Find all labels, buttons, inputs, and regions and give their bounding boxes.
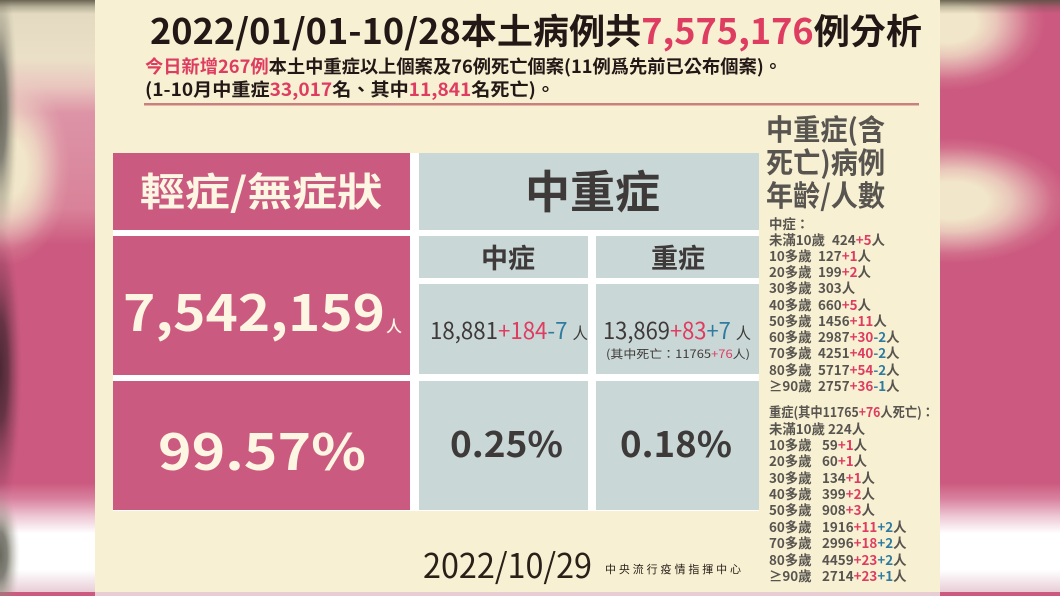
age list: severe: 134 [822, 467, 846, 487]
age list: moderate: 4251 [818, 342, 850, 362]
subheading: severe: 重症 [651, 237, 705, 276]
subtitle [145, 53, 782, 102]
age list: moderate: 20多歲 [769, 261, 812, 281]
age list: moderate: +54-2人 [850, 359, 900, 379]
age list: severe: +11+2人 [854, 516, 907, 536]
age list: severe: 50多歲 [769, 499, 812, 519]
age list: severe: 2996 [822, 532, 854, 552]
age list: severe: 59 [822, 434, 838, 454]
age list: severe: +23+2人 [854, 549, 907, 569]
age list: moderate: +30-2人 [850, 326, 900, 346]
age list: moderate: +40-2人 [850, 342, 900, 362]
age list: moderate: 5717 [818, 359, 850, 379]
blurred background: right strip [940, 0, 1060, 596]
age list: moderate: 人 [842, 277, 855, 297]
age list: severe: 重症(其中11765+76人死亡)： [769, 401, 934, 421]
title: 2022/01/01-10/28本土病例共 7,575,176例分析 [150, 4, 922, 55]
age list: severe: 399 [822, 483, 846, 503]
age list: moderate: +11人 [850, 310, 887, 330]
age list: severe: +1人 [838, 450, 867, 470]
age list: severe: 60 [822, 450, 838, 470]
percentage: severe: 0.18% [620, 417, 732, 468]
panel: mild / asymptomatic [113, 153, 410, 510]
age list: severe [769, 401, 934, 585]
subtitle line 1: 今日新增267例本土中重症以上個案及76例死亡個案(11例爲先前已公布個案)。 [145, 53, 782, 79]
age list: moderate: +36-1人 [850, 375, 900, 395]
age list: severe: 1916 [822, 516, 854, 536]
age list: severe: +1人 [838, 434, 867, 454]
sidebar heading: 死亡)病例 [766, 140, 885, 182]
age list: severe: +3人 [846, 499, 875, 519]
date: 2022/10/29 [423, 539, 592, 588]
age list: severe: +2人 [846, 483, 875, 503]
age list: moderate: 70多歲 [769, 342, 812, 362]
age list: severe: 908 [822, 499, 846, 519]
age list: moderate: 40多歲 [769, 294, 812, 314]
unit: mild: 人 [386, 313, 402, 337]
age list: moderate: 2987 [818, 326, 850, 346]
age list: moderate: 424 [832, 229, 856, 249]
age list: moderate: 50多歲 [769, 310, 812, 330]
deaths note: (其中死亡：11765 +76人) [606, 346, 750, 362]
age list: moderate: +1人 [842, 245, 871, 265]
age list: moderate: 1456 [818, 310, 850, 330]
age list: severe: 4459 [822, 549, 854, 569]
count: mild: 7,542,159 [123, 274, 385, 346]
table backing [113, 153, 759, 511]
subheading: moderate: 中症 [481, 237, 535, 276]
sidebar heading: 中重症(含 [766, 107, 885, 149]
percentage: mild: 99.57% [158, 413, 366, 485]
heading: moderate and severe: 中重症 [525, 156, 660, 221]
percentage: moderate: 0.25% [450, 417, 563, 468]
cream main panel [95, 0, 940, 592]
age list: severe: 60多歲 [769, 516, 812, 536]
age list: moderate: 80多歲 [769, 359, 812, 379]
age list: severe: ≥90歲 [769, 565, 812, 585]
panel: moderate and severe [419, 153, 759, 510]
age list: moderate: 660 [818, 294, 842, 314]
sidebar heading: 年齡/人數 [766, 173, 885, 215]
age list: moderate: 10多歲 [769, 245, 812, 265]
age list: moderate: 2757 [818, 375, 850, 395]
subtitle line 2: (1-10月中重症 33,017名、其中11,841名死亡)。 [145, 76, 555, 102]
heading: mild: 輕症/無症狀 [140, 162, 382, 218]
age list: severe: 30多歲 [769, 467, 812, 487]
age list: moderate: 30多歲 [769, 277, 812, 297]
blurred background: left strip [0, 0, 96, 596]
age list: moderate: +2人 [842, 261, 871, 281]
age list: severe: 未滿10歲 224人 [769, 418, 866, 438]
age list: severe: +23+1人 [854, 565, 907, 585]
count: severe: 13,869+83+7 人 [603, 312, 751, 346]
age list: severe: 10多歲 [769, 434, 812, 454]
age list: moderate: 中症： [769, 213, 809, 233]
age list: severe: +1人 [846, 467, 875, 487]
age list: moderate: 127 [818, 245, 842, 265]
age list: severe: 40多歲 [769, 483, 812, 503]
age list: severe: 80多歲 [769, 549, 812, 569]
age list: moderate [769, 213, 900, 395]
age list: moderate: 199 [818, 261, 842, 281]
age list: moderate: +5人 [842, 294, 871, 314]
sidebar heading [766, 107, 885, 215]
age list: severe: 2714 [822, 565, 854, 585]
age list: moderate: 未滿10歲 [769, 229, 825, 249]
age list: severe: 20多歲 [769, 450, 812, 470]
age list: moderate: 303 [818, 277, 842, 297]
age list: severe: +18+2人 [854, 532, 907, 552]
age list: severe: 70多歲 [769, 532, 812, 552]
source: CECC: 中央流行疫情指揮中心 [605, 561, 741, 577]
count: moderate: 18,881+184-7 人 [430, 312, 588, 346]
age list: moderate: 60多歲 [769, 326, 812, 346]
age list: moderate: +5人 [856, 229, 885, 249]
age list: moderate: ≥90歲 [769, 375, 812, 395]
